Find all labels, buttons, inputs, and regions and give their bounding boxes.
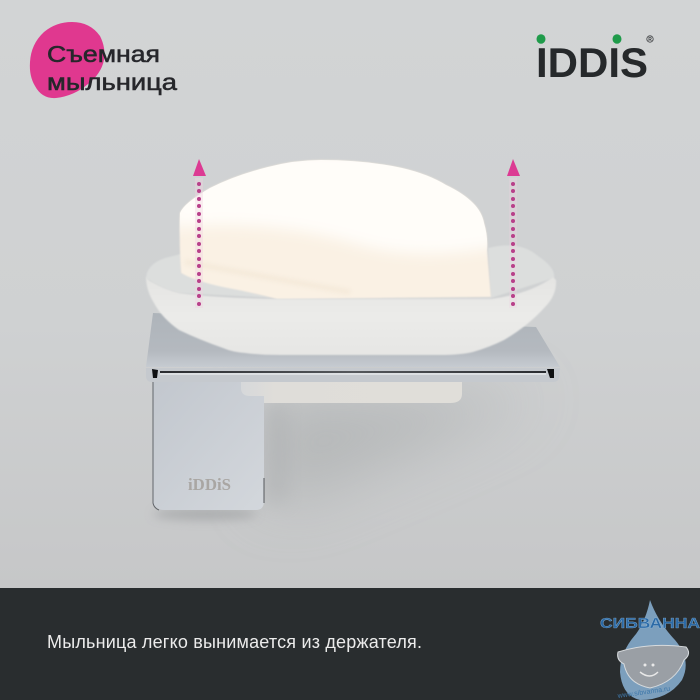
arrow: right upward (507, 159, 520, 308)
dish underside visible below shelf (241, 380, 462, 403)
soap dish front (146, 277, 556, 355)
footer band (0, 588, 700, 700)
IDDIS logo: R (648, 37, 652, 43)
wall bracket (153, 380, 264, 520)
soap bar (179, 160, 492, 299)
soap dish back rim (146, 245, 554, 299)
title second line: мыльница (47, 69, 177, 95)
watermark: Sibvanna logo: СИБВАННА (600, 615, 700, 632)
arrow: left upward (193, 159, 206, 308)
watermark: Sibvanna logo: www.sibvanna.ru (616, 686, 671, 700)
shelf plate (146, 313, 560, 382)
pink blob (30, 22, 104, 98)
title: Съемная (47, 41, 160, 67)
bracket logo: iDDiS (188, 475, 231, 494)
footer caption: Мыльница легко вынимается из держателя. (47, 632, 422, 652)
watermark: Sibvanna logo (600, 600, 700, 700)
shadow under shelf (264, 395, 540, 503)
IDDIS logo: IDDIS (536, 39, 648, 86)
